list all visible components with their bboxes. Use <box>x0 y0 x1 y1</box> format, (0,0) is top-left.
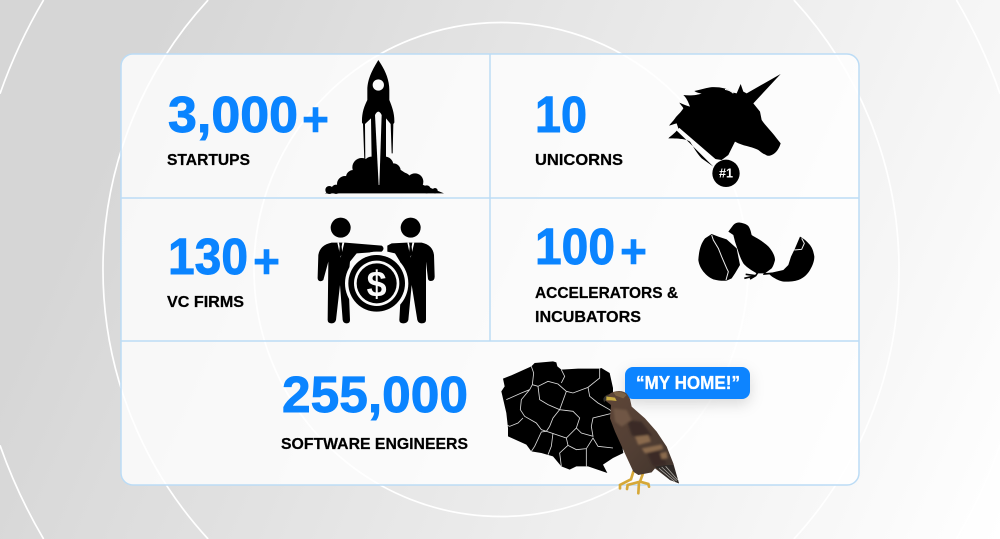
icon: unicorn <box>668 74 781 187</box>
stat: accelerators: 100 <box>535 218 615 275</box>
stat: startups: 3,000 <box>168 86 298 143</box>
map: Poland <box>501 361 623 473</box>
stat: software engineers: 255,000 <box>282 366 468 423</box>
stat: startups: STARTUPS <box>167 152 250 169</box>
stat: software engineers: SOFTWARE ENGINEERS <box>281 436 468 453</box>
stat: accelerators: ACCELERATORS & <box>535 285 678 302</box>
stat: accelerators: INCUBATORS <box>535 309 641 326</box>
stat: VC firms: VC FIRMS <box>167 294 244 311</box>
stat: accelerators <box>535 218 678 326</box>
stat: unicorns <box>535 86 623 169</box>
eagle <box>603 391 679 493</box>
dollar sign: $ <box>367 263 387 304</box>
stat: unicorns: UNICORNS <box>535 152 623 169</box>
stat: software engineers <box>281 366 468 453</box>
speech bubble <box>625 367 750 399</box>
stat: unicorns: 10 <box>535 86 587 143</box>
stat: startups: + <box>302 94 329 147</box>
stat: startups <box>167 86 329 169</box>
medal text: #1 <box>719 167 733 181</box>
stat: VC firms: 130 <box>168 228 248 285</box>
icon: hatching chick <box>698 223 814 282</box>
panel: stats card <box>121 54 859 485</box>
stat: VC firms: + <box>253 236 280 289</box>
icon: investors with coin <box>318 218 435 323</box>
speech bubble: “MY HOME!” <box>636 373 740 393</box>
stat: VC firms <box>167 228 280 311</box>
stat: accelerators: + <box>620 226 647 279</box>
icon: rocket <box>325 60 444 194</box>
